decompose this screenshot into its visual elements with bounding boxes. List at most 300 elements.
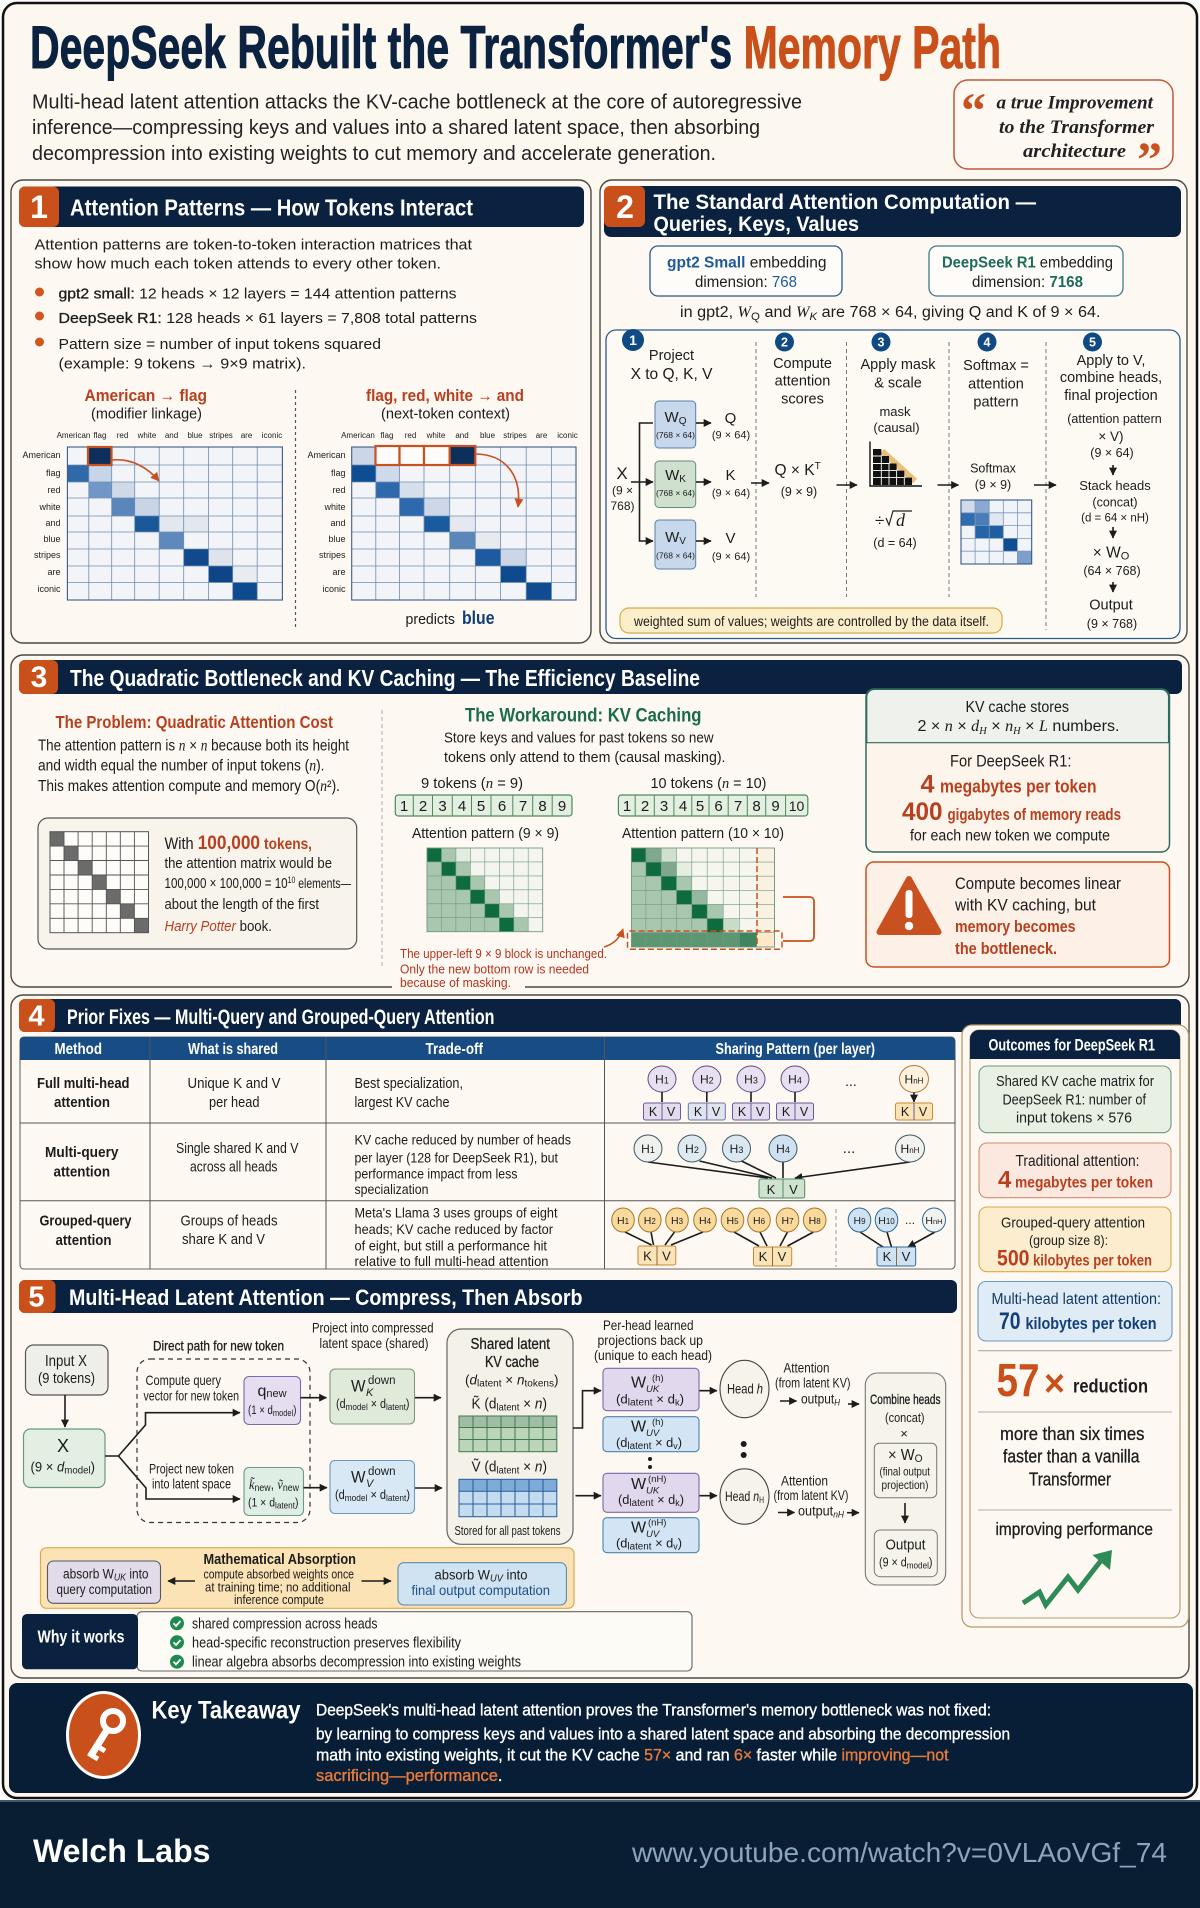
table header [20,1037,955,1060]
step 2: scores [781,392,824,408]
diagram: 9 token pattern: 9 tokens (n = 9) [421,775,523,792]
diagram: full multi-head sharing: K [649,1105,658,1119]
combine heads block: (concat) [885,1410,924,1425]
callout: quote [954,80,1173,187]
k v new box: latent [275,1500,295,1510]
chart: next-token attention matrix: blue [480,431,496,440]
absorb query box: absorb W [63,1566,121,1582]
chart: next-token attention matrix: and [455,431,469,440]
diagram: grouped-query sharing [612,1208,946,1267]
input X: Input X [45,1353,88,1370]
W V down box: latent [386,1493,407,1504]
projection boxes: v [673,1542,678,1552]
heading: outcomes: Outcomes for DeepSeek R1 [988,1036,1155,1054]
step 3: (d = 64) [873,536,917,550]
formula line: Q [751,311,760,323]
checklist: shared compression across heads [192,1616,378,1632]
shared latent KV cache: × [519,1460,535,1476]
callout: 100,000 tokens: 10 [288,875,295,885]
projection boxes: k [675,1498,680,1508]
absorption text: at training time; no additional [205,1580,351,1594]
diagram: grouped-query sharing: V [662,1248,671,1264]
footer: Welch Labs [33,1833,210,1869]
diagram: full multi-head sharing: V [712,1105,721,1119]
callout: KV cache size: KV cache stores [966,699,1069,716]
diagram: 9 token pattern: 2 [419,798,427,815]
step 5: (concat) [1092,496,1138,510]
text block: the problem: The Problem: Quadratic Attention Cost [56,712,333,732]
projection boxes: W [631,1374,647,1392]
shared latent KV cache: Shared latent [470,1336,550,1353]
heading: section 5: 5 [28,1282,45,1314]
diagram: 10 token pattern: 5 [696,798,704,815]
step 1: X to Q, K, V [631,366,713,383]
direct path group: Compute query [146,1372,221,1388]
combine heads block: Combine heads [870,1391,940,1407]
diagram: grouped-query sharing: H3 [671,1215,684,1227]
chart: next-token attention matrix: flag, red, white → and [366,387,524,405]
heading: section 3: The Quadratic Bottleneck and KV Caching — The Efficiency Baseline [70,665,700,691]
attention output labels: output [801,1392,839,1406]
W V down box [330,1460,414,1514]
outcome: grouped-query: Grouped-query attention [1001,1214,1145,1232]
step 1: (9 × 64) [712,488,750,500]
bullet list [35,286,477,372]
X matrix box: ) [91,1460,95,1474]
bullet list: DeepSeek R1: 128 heads × 61 layers = 7,808 total patterns [58,310,477,327]
row: multi-query: KV cache reduced by number of heads [354,1132,571,1148]
callout: quote: ” [1137,131,1162,187]
arrow: note to new row [604,929,623,947]
chart: next-token attention matrix: American [341,431,375,440]
projection boxes: × d [652,1536,673,1550]
chart: next-token attention matrix: American [307,450,346,460]
chart: next-token attention matrix: stripes [503,431,527,440]
chart: American flag attention matrix: and [165,431,178,440]
diagram: 9 token pattern: 5 [477,798,485,815]
projection boxes: k [675,1398,680,1408]
step 2 [773,332,857,499]
intro text [32,90,802,165]
step 5: (9 × 64) [1090,446,1134,460]
diagram: full multi-head sharing: V [800,1105,809,1119]
diagram: multi-query sharing: V [789,1182,798,1197]
panel: why it works: Why it works [38,1626,125,1646]
diagram: grouped-query sharing: H4 [699,1215,712,1227]
callout: gpt2 embedding [650,246,842,296]
W K down box: K [366,1387,374,1399]
diagram: full multi-head sharing: HnH [905,1072,924,1086]
W V down box: (d [335,1488,346,1502]
outcome: latent attention: kilobytes per token [1026,1315,1156,1333]
label: per-head projections: (unique to each head) [594,1348,712,1363]
chart: next-token attention matrix [307,387,578,628]
step 1: K [725,467,736,484]
diagram: 10 token pattern [618,775,814,949]
diagram: 9 token pattern: 6 [498,798,506,815]
W K down box: (d [336,1397,347,1411]
note: weighted sum: weighted sum of values; weights are controlled by the data itself. [633,614,989,629]
k v new box: k̃ [249,1476,255,1493]
text block: the problem: The attention pattern is n × n because both its height [38,738,350,754]
diagram: grouped-query sharing: K [643,1248,652,1264]
chart: next-token attention matrix: predicts [406,611,455,628]
diagram: multi-query sharing [634,1135,924,1198]
takeaway text: sacrificing—performance. [316,1767,503,1785]
chart: softmax pattern [961,500,1032,564]
projection boxes: ) [680,1392,684,1406]
diagram: 10 token pattern: 3 [660,798,668,815]
diagram: 10 token pattern: 7 [734,798,742,815]
shared latent KV cache: Stored for all past tokens [454,1524,560,1538]
heading: section 2: The Standard Attention Computation — [654,190,1036,214]
head nH [720,1469,769,1524]
row: full multi-head [37,1075,463,1111]
direct path group: Project new token [149,1460,234,1476]
row: grouped-query: Groups of heads [180,1212,278,1230]
diagram: full multi-head sharing: K [782,1105,791,1119]
k v new box: (1 × d [248,1498,278,1510]
heading: section 1: 1 [30,189,48,225]
chart: American flag attention matrix: blue [187,431,203,440]
row: full multi-head: per head [209,1094,260,1111]
diagram: grouped-query sharing: V [778,1249,787,1264]
step 5: × W [1093,544,1121,562]
outcome: grouped-query [979,1207,1171,1272]
diagram: full multi-head sharing: H3 [744,1072,758,1086]
icon: rising arrow [1023,1550,1112,1605]
W K down box: W [351,1376,366,1396]
outcome: latent attention [978,1282,1172,1341]
step 5: Stack heads [1079,478,1151,493]
diagram: full multi-head sharing: H4 [788,1072,802,1086]
callout: 100,000 tokens [38,818,357,949]
attention output labels: (from latent KV) [775,1376,850,1390]
arrow: predicts next token [475,454,519,507]
step 5: combine heads, [1060,370,1162,386]
chart: next-token attention matrix: iconic [557,431,578,440]
shared latent KV cache: K̃ (d [472,1396,498,1412]
callout: KV cache size: H [1012,726,1021,737]
diagram: 9 token pattern: 1 [400,798,408,815]
row: grouped-query [40,1204,558,1269]
diagram: multi-query sharing: H4 [776,1142,790,1156]
projection boxes: UV [646,1529,661,1540]
row: full multi-head: Best specialization, [354,1075,463,1092]
chart: American flag attention matrix: American → flag [84,387,207,405]
note: masking: The upper-left 9 × 9 block is unchanged. [400,947,607,961]
diagram: grouped-query sharing: H2 [644,1215,656,1227]
step 1: V [725,530,736,547]
outcome: grouped-query: 500 [997,1246,1030,1270]
diagram: grouped-query sharing: HnH [925,1215,943,1227]
step 1: (768 × 64) [656,488,695,498]
step 5: (attention pattern [1067,412,1162,426]
W V down box: ) [406,1488,410,1502]
step 5: O [1121,550,1130,562]
label: per-head projections [594,1318,712,1363]
arrow: input to X [64,1395,66,1427]
absorb query box [48,1561,160,1603]
callout: DeepSeek embedding: DeepSeek R1 embedding [942,254,1113,272]
absorption text [204,1551,356,1607]
diagram: grouped-query sharing: H7 [781,1215,794,1227]
step 2: Compute [773,356,832,372]
note: masking: Only the new bottom row is needed [400,962,589,976]
diagram: 9 token pattern: 7 [519,798,527,815]
step 5: (d = 64 × nH) [1081,512,1149,524]
shared latent KV cache: n) [535,1460,547,1476]
step 5 [1060,332,1162,631]
row: multi-query: Multi-query [45,1144,119,1161]
absorb output box: absorb W [434,1566,494,1582]
combine heads block: × W [888,1447,917,1464]
diagram: full multi-head sharing: ... [845,1073,857,1089]
row: grouped-query: Grouped-query [40,1212,132,1230]
chart: next-token attention matrix: (next-token context) [381,406,510,422]
heading: section 5: Multi-Head Latent Attention — Compress, Then Absorb [69,1285,582,1310]
callout: DeepSeek embedding [929,246,1123,296]
icon: key [68,1692,140,1778]
diagram: grouped-query sharing: K [759,1249,768,1264]
combine heads block: projection) [882,1478,928,1492]
diagram: grouped-query sharing: ... [905,1213,915,1227]
heading: section 2: 2 [616,189,634,225]
attention output labels: nH [833,1510,844,1520]
step 4: pattern [973,394,1019,410]
diagram: 9 token pattern: 3 [438,798,447,815]
label: per-head projections: projections back up [598,1333,703,1348]
k v new box: ṽ [277,1478,284,1493]
step 5: (64 × 768) [1083,564,1141,578]
step 5: 5 [1089,336,1096,350]
takeaway text: math into existing weights, it cut the KV cache 57× and ran 6× faster while improving—not [316,1746,949,1764]
text block: faster: more than six times [1000,1424,1144,1444]
diagram: full multi-head sharing [644,1066,932,1120]
shared latent KV cache: latent [496,1402,520,1414]
head nH: H [759,1495,764,1505]
diagram: grouped-query sharing: V [902,1249,911,1264]
diagram: full multi-head sharing: K [738,1105,747,1119]
combine heads block [865,1373,946,1585]
text block: faster: Transformer [1029,1470,1111,1490]
row: grouped-query: heads; KV cache reduced by factor [354,1221,553,1237]
shared latent KV cache: latent [496,1466,520,1476]
direct path group: into latent space [152,1476,231,1492]
diagram: full multi-head sharing: V [756,1105,765,1119]
arrows: cache to projections [573,1391,601,1496]
callout: KV cache size: gigabytes of memory reads [948,806,1121,824]
step 3: mask [879,404,911,419]
direct path group [137,1338,310,1522]
takeaway text: by learning to compress keys and values into a shared latent space and absorbing the decompression [316,1726,1010,1744]
step 1: 768) [610,499,635,513]
shared latent KV cache: KV cache [485,1354,539,1371]
outcome: shared matrix [979,1066,1171,1133]
chart: next-token attention matrix: white [323,502,346,512]
outcome: traditional attention [979,1143,1171,1198]
chart: American flag attention matrix: iconic [37,584,61,594]
step 5: × V) [1098,429,1124,444]
bullet list: (example: 9 tokens → 9×9 matrix). [58,356,306,372]
step 1: Q [725,410,736,427]
absorb output box: into [503,1566,528,1582]
combine heads block: × [900,1426,908,1441]
chart: next-token attention matrix: iconic [322,584,346,594]
absorb query box: UK [114,1572,127,1584]
projection boxes: (h) [652,1417,664,1428]
diagram: 10 token pattern: 9 [771,798,780,815]
chart: next-token attention matrix: and [330,518,346,528]
diagram: 10 token pattern: 1 [623,798,631,815]
callout: quote: to the Transformer [999,117,1155,138]
projection boxes: latent [627,1441,652,1452]
chart: next-token attention matrix: red [405,431,416,440]
label: per-head projections: Per-head learned [603,1318,694,1333]
callout: KV cache size: n [1005,718,1013,735]
chart: next-token attention matrix: are [332,567,346,577]
step 3: Apply mask [861,357,936,373]
panel: key takeaway: Key Takeaway [152,1696,301,1724]
text block: faster: faster than a vanilla [1003,1446,1140,1466]
shared latent KV cache: × [519,1396,535,1412]
k v new box: , [271,1476,277,1492]
W K down box: × d [368,1397,386,1411]
text block: definition: Attention patterns are token-to-token interaction matrices that [34,236,473,254]
step 1: W [665,409,679,426]
callout: 100,000 tokens: about the length of the first [164,896,320,913]
combine heads block: model [907,1560,929,1572]
row: full multi-head: attention [54,1094,110,1111]
chart: next-token attention matrix: white [426,431,446,440]
outcome: shared matrix: Shared KV cache matrix for [996,1073,1154,1090]
stat: 57x reduction: reduction [1073,1376,1148,1398]
step 3 [861,332,958,550]
diagram: 10 token pattern: Attention pattern (10 × 10) [622,826,784,842]
step 1: (768 × 64) [656,430,695,440]
projection boxes: × d [652,1435,673,1450]
callout: KV cache size: H [978,726,988,737]
row: grouped-query: relative to full multi-head attention [354,1253,548,1269]
projection boxes: (d [616,1536,628,1550]
callout: KV cache size: L numbers. [1039,718,1117,735]
absorb query box: query computation [56,1582,152,1597]
panel: outcomes for DeepSeek R1 [962,1025,1188,1627]
diagram: grouped-query sharing: H1 [617,1215,630,1227]
W K down box: down [368,1375,396,1387]
outcome: traditional attention: Traditional attention: [1016,1153,1140,1170]
shared latent KV cache: (d [465,1372,477,1388]
chart: green 10x10 matrix [628,848,814,949]
chart: American flag attention matrix: stripes [209,431,233,440]
q new box: q [257,1383,266,1400]
formula line: are 768 × 64, giving Q and K of 9 × 64. [817,304,1100,321]
diagram: grouped-query sharing: H9 [853,1215,866,1227]
W K down box [330,1369,414,1424]
diagram: multi-query sharing: ... [843,1140,855,1157]
projection boxes: W [631,1418,647,1436]
projection boxes: ) [680,1492,684,1507]
absorb output box: final output computation [412,1582,550,1598]
combine heads block: (final output [880,1464,931,1478]
diagram: full multi-head sharing: V [919,1105,928,1119]
callout: KV cache size: For DeepSeek R1: [950,752,1072,770]
row: multi-query: specialization [354,1181,428,1197]
projection boxes: UK [646,1486,660,1496]
icon: causal mask staircase [870,442,922,486]
projection boxes: ) [678,1536,682,1550]
step 1 [610,329,769,569]
W V down box: model [345,1493,367,1504]
step 5: final projection [1064,388,1158,404]
row: multi-query: per layer (128 for DeepSeek R1), but [354,1150,558,1166]
table header: Trade-off [426,1041,484,1058]
callout: DeepSeek embedding: dimension: 7168 [972,274,1083,291]
chart: American flag attention matrix: stripes [34,550,61,560]
formula line: W [796,304,812,321]
projection boxes: × d [653,1392,675,1406]
q new box: model [273,1408,293,1418]
label: project into compressed: latent space (shared) [320,1335,428,1351]
takeaway text: DeepSeek's multi-head latent attention proves the Transformer's memory bottleneck was not fixed: [316,1702,991,1720]
callout: KV cache size [866,689,1170,852]
stat: 57x reduction: × [1044,1363,1065,1405]
absorb query box: into [126,1566,148,1582]
diagram: grouped-query sharing: H8 [809,1215,821,1227]
shared latent KV cache: × [502,1372,517,1388]
callout: warning [866,862,1170,967]
diagram: 10 token pattern: 8 [752,798,761,815]
callout: warning: the bottleneck. [955,940,1057,958]
step 1: (9 × 64) [712,551,750,563]
chart: green 9x9 matrix [427,848,543,932]
chart: American flag attention matrix: white [137,431,157,440]
diagram: 10 token pattern: 10 [789,798,804,814]
row: full multi-head: largest KV cache [354,1094,450,1111]
q new box: new [266,1388,287,1400]
head nH: Head n [725,1488,761,1504]
step 1: (9 × 64) [712,430,750,442]
arrows: branching from X [105,1413,240,1499]
head h: Head h [727,1380,763,1396]
diagram: 9 token pattern: Attention pattern (9 × 9) [412,826,559,842]
intro text: Multi-head latent attention attacks the KV-cache bottleneck at the core of autoregressive [32,90,802,114]
outcome: shared matrix: input tokens × 576 [1016,1110,1132,1126]
label: project into compressed: Project into compressed [312,1320,434,1336]
projection boxes: latent [627,1542,652,1552]
outcome: latent attention: Multi-head latent attention: [992,1291,1161,1308]
arrow: flag link [112,460,159,481]
callout: quote: “ [961,82,986,138]
diagram: full multi-head sharing: V [667,1105,676,1119]
chart: American flag attention matrix: red [117,431,128,440]
callout: gpt2 embedding: gpt2 Small embedding [667,254,826,272]
shared latent KV cache [447,1329,573,1544]
projection boxes: UK [646,1384,660,1395]
step 2: attention [775,374,830,390]
projection boxes: v [673,1441,678,1451]
chart: American flag attention matrix: white [38,502,60,512]
W V down box: down [368,1466,396,1478]
panel: key takeaway [9,1683,1193,1793]
head h [720,1360,769,1418]
text block: definition [34,236,473,272]
outcome: latent attention: 70 [999,1308,1020,1335]
row: multi-query: Single shared K and V [176,1140,298,1157]
diagram: 10 token pattern: 4 [679,798,687,815]
diagram: multi-query sharing: HnH [901,1142,920,1156]
absorption text: compute absorbed weights once [204,1566,354,1582]
